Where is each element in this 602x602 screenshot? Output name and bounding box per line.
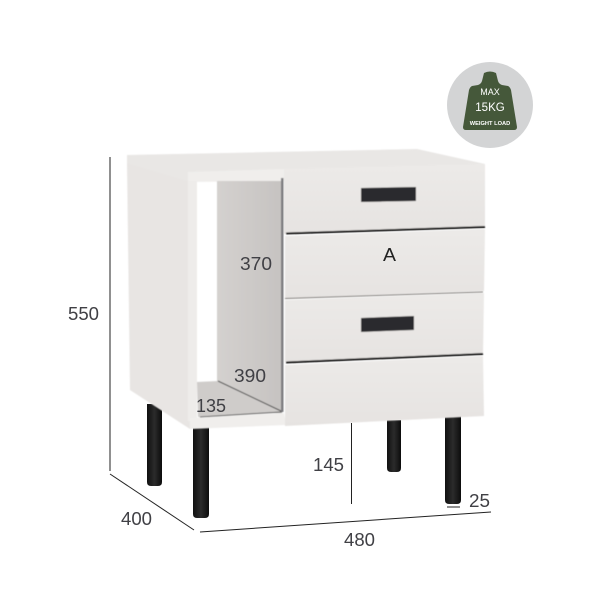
- inner upright: [188, 181, 197, 421]
- label 550: 550: [68, 304, 99, 324]
- cabinet body: [127, 149, 485, 429]
- left side panel: [127, 163, 190, 429]
- back panel of opening: [217, 181, 282, 413]
- badge text: MAX: [480, 87, 500, 97]
- label 390: 390: [234, 366, 266, 386]
- drawer handle top: [361, 187, 416, 202]
- top panel: [127, 149, 485, 182]
- dimension line: height: [109, 157, 111, 471]
- badge text: WEIGHT LOAD: [470, 121, 510, 127]
- drawer handle bottom: [361, 316, 414, 332]
- label 145: 145: [313, 455, 344, 475]
- dimension line: width: [200, 512, 491, 532]
- label A: A: [383, 245, 396, 265]
- legs: [147, 404, 461, 518]
- front edge of top: [188, 169, 284, 182]
- label 25: 25: [469, 491, 490, 511]
- icon: weight: [463, 72, 517, 130]
- badge text: 15KG: [475, 102, 505, 114]
- badge: max weight load: [447, 62, 533, 148]
- drawer fronts: [284, 164, 485, 426]
- badge text: [470, 87, 510, 127]
- dimension line: depth: [110, 474, 194, 530]
- label 480: 480: [344, 530, 375, 550]
- label 370: 370: [240, 254, 272, 274]
- dimension line: leg height: [350, 423, 352, 504]
- label 135: 135: [196, 396, 226, 416]
- right edge shadow: [281, 178, 284, 412]
- label 400: 400: [121, 509, 152, 529]
- shelf floor: [197, 381, 282, 417]
- dimension tick: leg width: [447, 506, 460, 508]
- bottom front edge: [190, 413, 286, 429]
- drawer gaps: [285, 227, 485, 362]
